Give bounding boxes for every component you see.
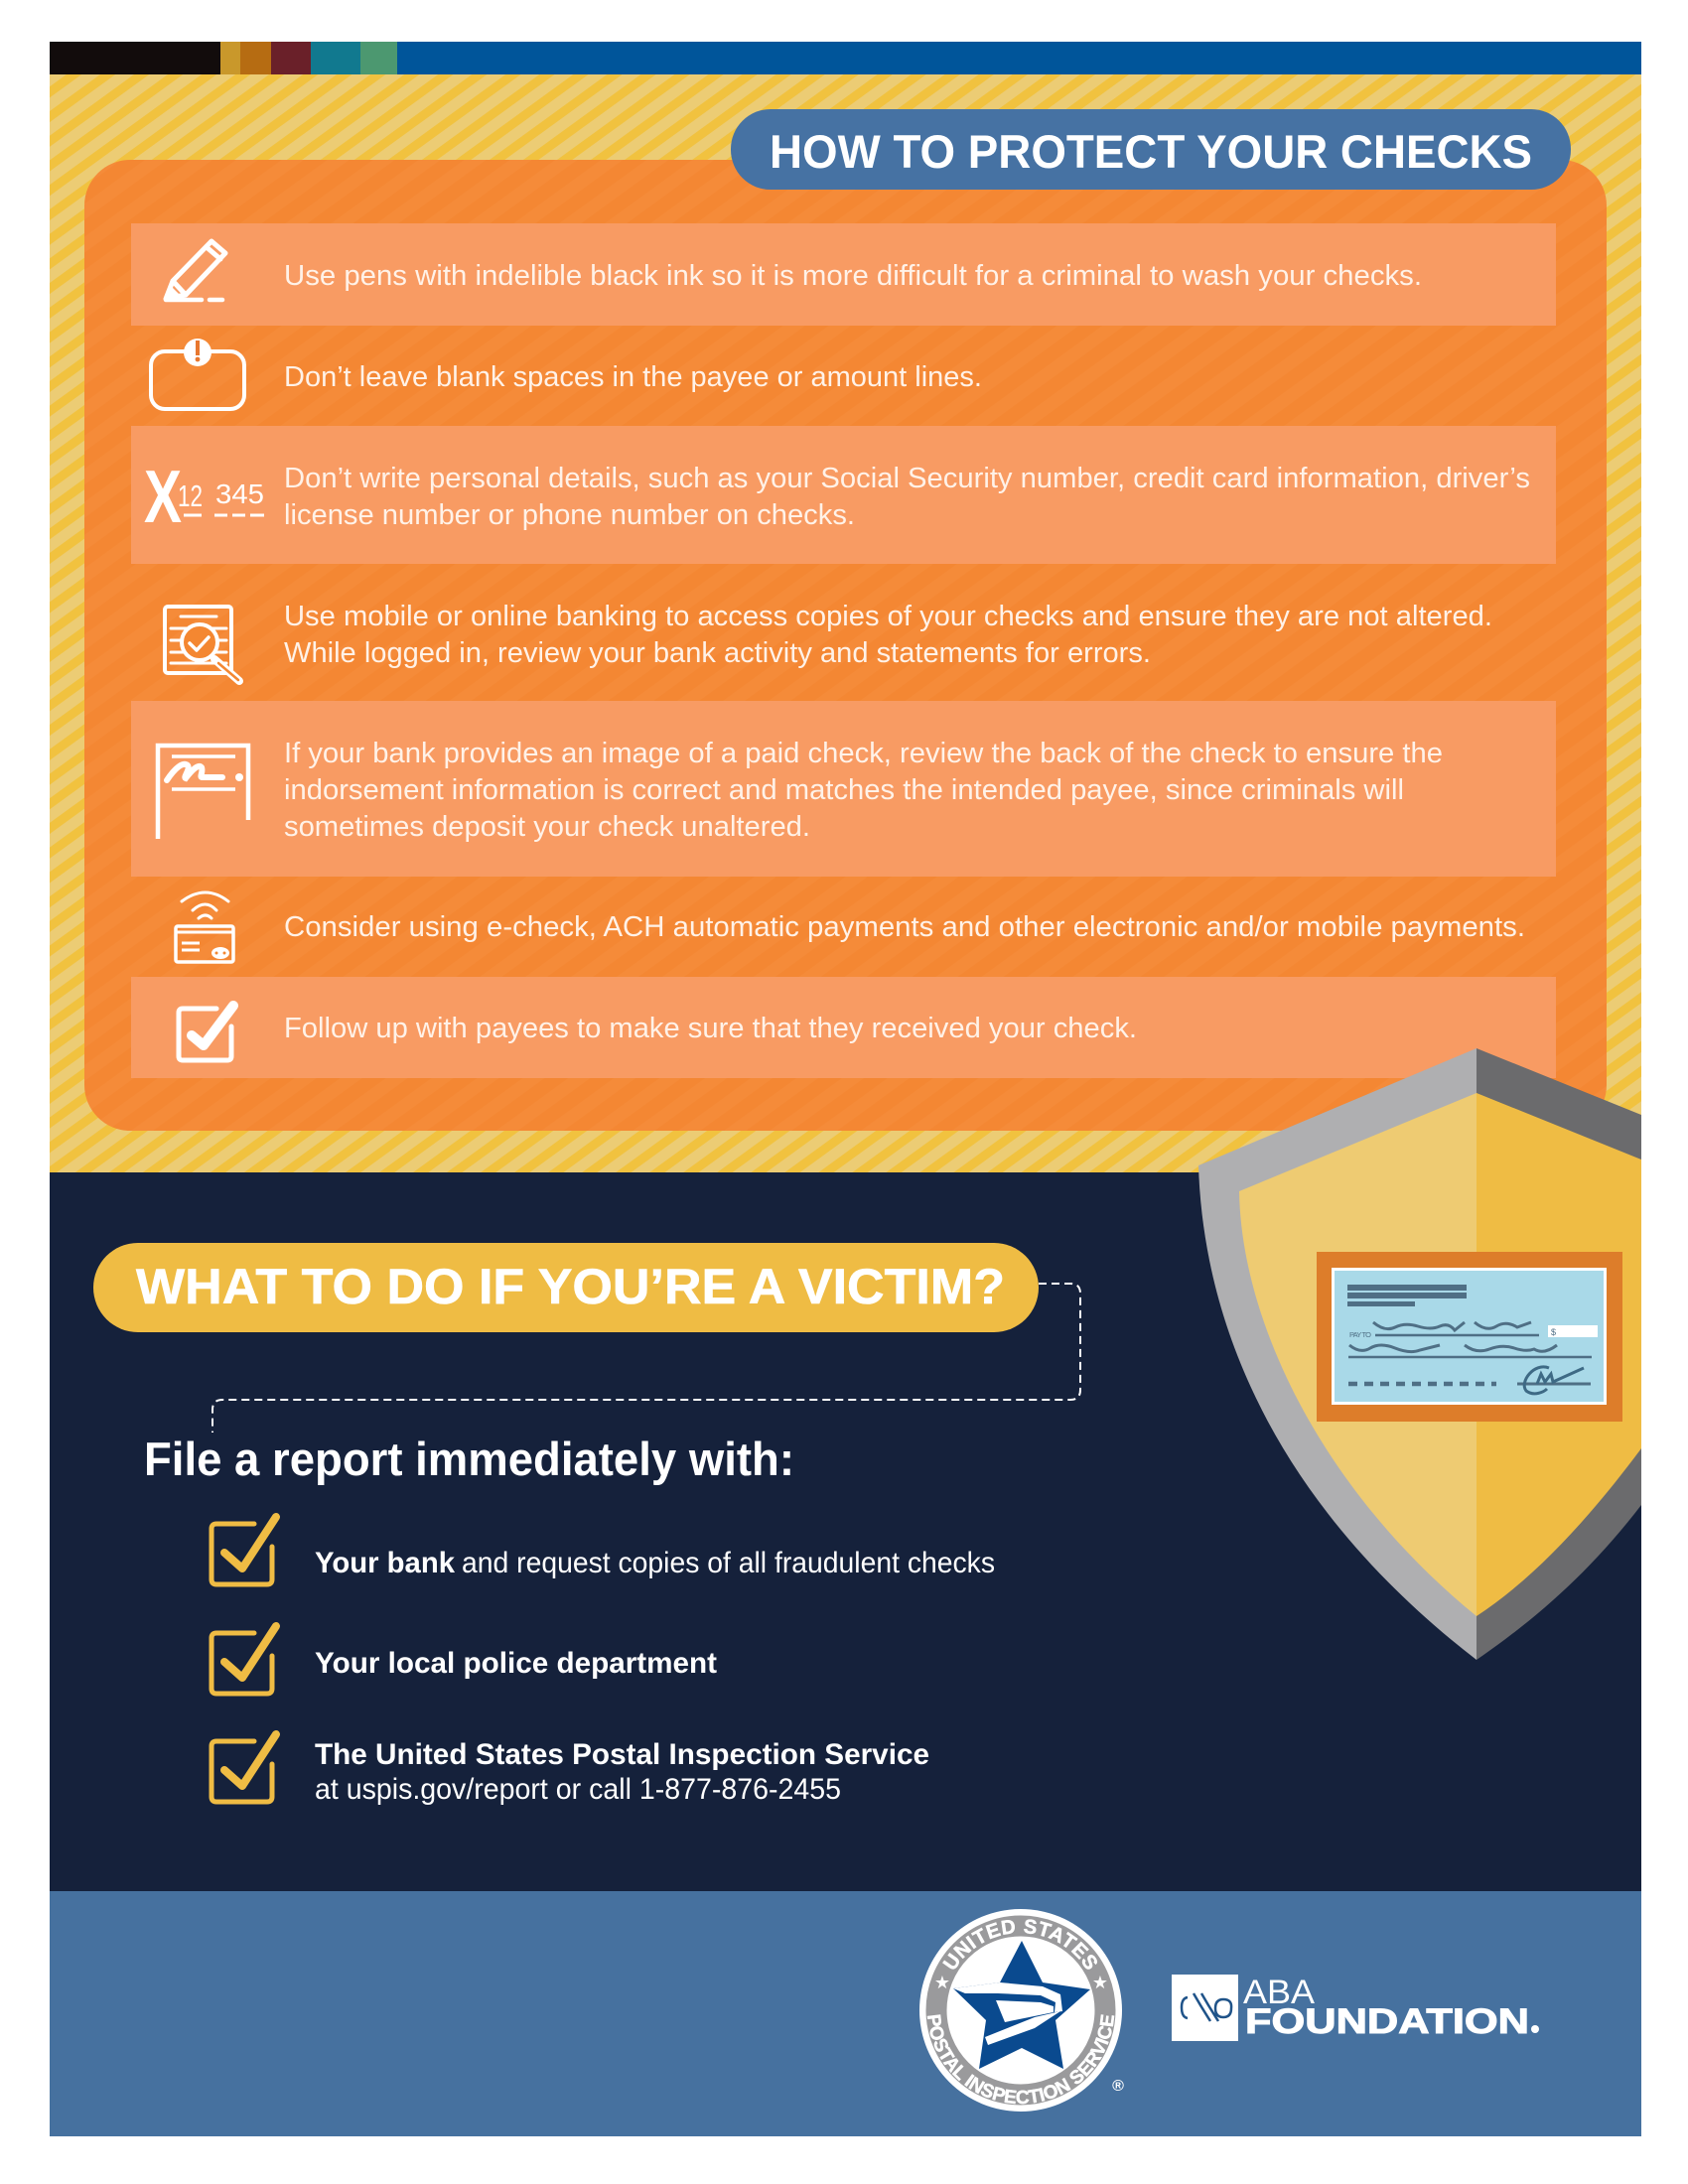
- tip 3: personal details: license number or phone number on checks.: [284, 499, 855, 531]
- logo: postal inspection service seal: ★: [934, 1973, 950, 1992]
- tip 5: check image: If your bank provides an image of a paid check, review the back of the check to ensure the: [284, 738, 1443, 769]
- footer band: [50, 1891, 1641, 2136]
- heading: what to do if you're a victim: WHAT TO DO IF YOU’RE A VICTIM?: [136, 1259, 1005, 1314]
- icon: back of check: [158, 746, 248, 839]
- logo: aba foundation: FOUNDATION: [1245, 2002, 1529, 2041]
- item: postal inspection service: at uspis.gov/report or call 1-877-876-2455: [315, 1773, 841, 1806]
- heading: what to do if you're a victim: [93, 1243, 1039, 1332]
- icon: X with numbers: [144, 455, 264, 538]
- tip 1: indelible ink: Use pens with indelible black ink so it is more difficult for a criminal to wash your checks.: [284, 260, 1422, 292]
- icon: contactless card: [176, 892, 233, 962]
- check illustration: PAY TO: [1349, 1330, 1371, 1339]
- icon: X with numbers: 12: [178, 478, 203, 513]
- tip 5: check image: indorsement information is correct and matches the intended payee, since criminals will: [284, 774, 1404, 806]
- tip 4: online banking: While logged in, review your bank activity and statements for errors.: [284, 637, 1151, 669]
- icon: X with numbers: X: [144, 455, 182, 538]
- icon: X with numbers: 345: [215, 478, 264, 509]
- tip 1: indelible ink: [131, 223, 1556, 326]
- item: postal inspection service: The United States Postal Inspection Service: [315, 1738, 929, 1771]
- tip 2: blank spaces: [151, 339, 982, 409]
- tip 7: follow up: [131, 977, 1556, 1078]
- subheading: file a report: File a report immediately with:: [144, 1433, 794, 1485]
- panel: what to do if you're a victim: [50, 1172, 1641, 1891]
- icon: blank box with alert: [151, 339, 244, 409]
- panel: how to protect your checks: [84, 160, 1607, 1131]
- heading: how to protect your checks: HOW TO PROTECT YOUR CHECKS: [770, 125, 1532, 178]
- heading: how to protect your checks: [731, 109, 1571, 190]
- item: your bank: and request copies of all fraudulent checks: [462, 1547, 995, 1579]
- logo: postal inspection service seal: ®: [1112, 2078, 1124, 2095]
- tip 4: online banking: [165, 601, 1492, 681]
- tip 3: personal details: [131, 426, 1556, 564]
- shield with check illustration: [1198, 1048, 1641, 1660]
- connector: dashed line: [212, 1284, 1080, 1433]
- icon: document under magnifier: [165, 607, 239, 681]
- item: your bank: Your bank: [315, 1547, 455, 1579]
- icon: yellow check box: [211, 1734, 276, 1802]
- tip 2: blank spaces: Don’t leave blank spaces in the payee or amount lines.: [284, 361, 982, 393]
- tip 5: check image: sometimes deposit your check unaltered.: [284, 811, 810, 843]
- logo: postal inspection service seal: POSTAL INSPECTION SERVICE: [927, 2014, 1114, 2105]
- tip 3: personal details: Don’t write personal details, such as your Social Security number, credit card information, driver’s: [284, 463, 1530, 494]
- logo: aba foundation: ABA: [1243, 1974, 1315, 2011]
- logo: postal inspection service seal: [919, 1909, 1124, 2112]
- tip 7: follow up: Follow up with payees to make sure that they received your check.: [284, 1013, 1137, 1044]
- striped yellow background: [50, 74, 1641, 1173]
- item: local police: Your local police department: [315, 1647, 717, 1680]
- icon: pencil: [166, 241, 225, 300]
- top colour bar: [50, 42, 1641, 74]
- item: local police: [211, 1626, 717, 1694]
- icon: yellow check box: [211, 1517, 276, 1584]
- tip 6: electronic payments: [176, 892, 1525, 962]
- icon: yellow check box: [211, 1626, 276, 1694]
- icon: check box: [179, 1006, 233, 1060]
- item: your bank: [211, 1517, 995, 1584]
- logo: postal inspection service seal: UNITED STATES: [942, 1919, 1098, 1970]
- tip 5: check image: [131, 701, 1556, 877]
- tip 6: electronic payments: Consider using e-check, ACH automatic payments and other electronic and/or mobile payments.: [284, 911, 1525, 943]
- item: postal inspection service: [211, 1734, 929, 1806]
- logo: postal inspection service seal: ★: [1092, 1973, 1108, 1992]
- check illustration: [1317, 1252, 1622, 1422]
- check illustration: $: [1551, 1327, 1556, 1337]
- logo: aba foundation: [1172, 1974, 1539, 2041]
- tip 4: online banking: Use mobile or online banking to access copies of your checks and ensure they are not altered.: [284, 601, 1492, 632]
